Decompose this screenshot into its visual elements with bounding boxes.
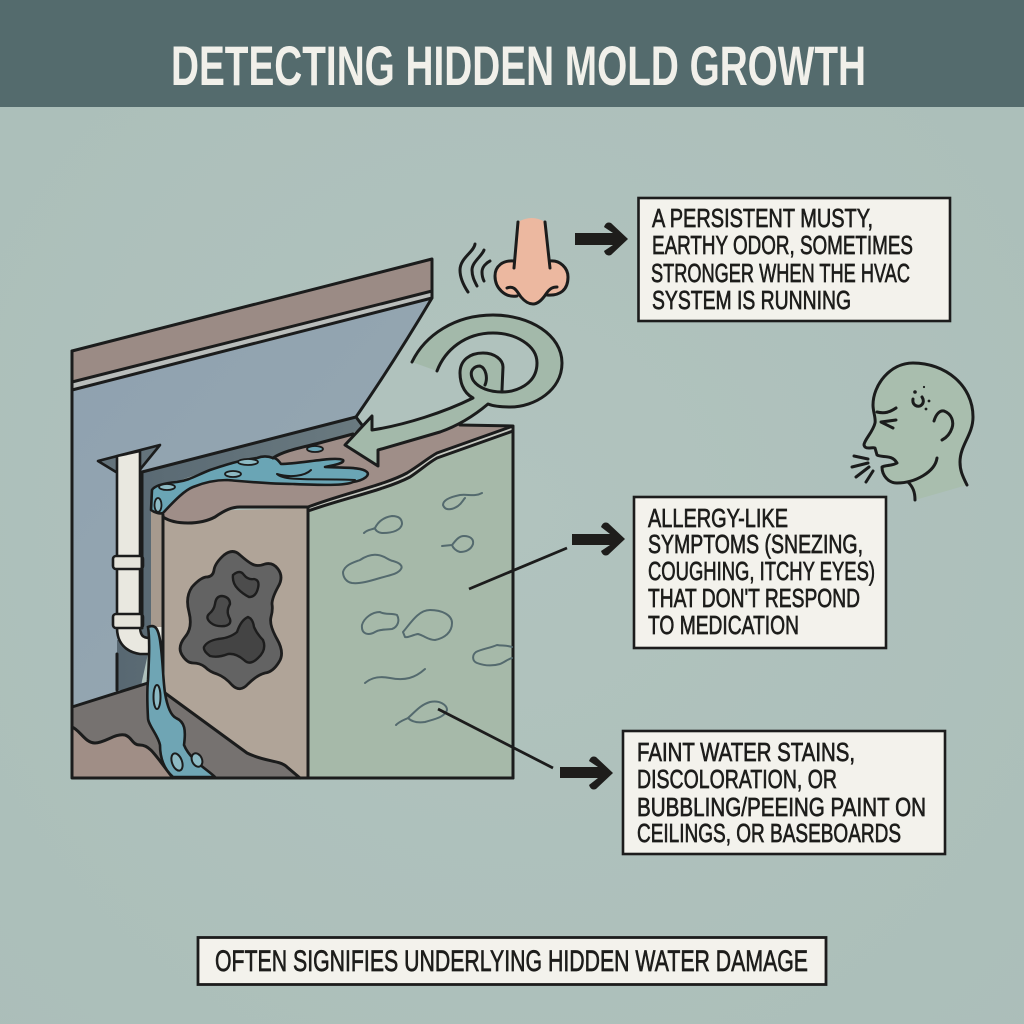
leader line to allergy box [469, 548, 567, 589]
swirl arrow [345, 315, 562, 466]
blue back wall [72, 298, 432, 707]
building cutaway illustration [72, 259, 562, 778]
arrow: stain to water stain box [560, 756, 613, 790]
leader line to water stain box [438, 709, 553, 768]
icon: sneezing head [852, 363, 973, 500]
callout: water stains [623, 731, 945, 854]
beige wall with mold [163, 508, 308, 778]
arrow: nose to odor box [575, 222, 628, 256]
callout: water stains: DISCOLORATION, OR [637, 764, 837, 794]
arrow: wall to allergy box [572, 522, 625, 556]
callout: odor: EARTHY ODOR, SOMETIMES [652, 230, 913, 260]
green wall with stains [308, 431, 513, 778]
left frame lines [72, 351, 513, 778]
callout: water stains: FAINT WATER STAINS, [637, 737, 855, 767]
callout: allergy symptoms: SYMPTOMS (SNEZING, [648, 529, 863, 559]
footer note [198, 938, 826, 984]
drain pipe [98, 445, 163, 654]
brown top surface [163, 425, 513, 523]
callout: allergy symptoms: ALLERGY-LIKE [648, 503, 788, 533]
callout: allergy symptoms: THAT DON'T RESPOND [648, 583, 860, 613]
callout: odor: SYSTEM IS RUNNING [652, 285, 851, 315]
callout: odor: STRONGER WHEN THE HVAC [651, 258, 910, 288]
callout: allergy symptoms: TO MEDICATION [648, 610, 799, 640]
header banner [0, 0, 1024, 107]
water stream [147, 434, 368, 777]
callout: water stains: BUBBLING/PEEING PAINT ON [637, 792, 926, 822]
dark back strip [117, 417, 362, 690]
callout: odor: A PERSISTENT MUSTY, [652, 203, 873, 233]
mold patch [180, 552, 282, 689]
floor [72, 683, 300, 778]
callout: allergy symptoms: COUGHING, ITCHY EYES) [648, 556, 875, 586]
ceiling band [72, 259, 432, 382]
callout: odor [638, 198, 950, 321]
callout: allergy symptoms [634, 497, 886, 648]
wall stains [343, 493, 512, 725]
icon: nose with smell waves [460, 218, 568, 304]
callout: water stains: CEILINGS, OR BASEBOARDS [637, 818, 901, 848]
